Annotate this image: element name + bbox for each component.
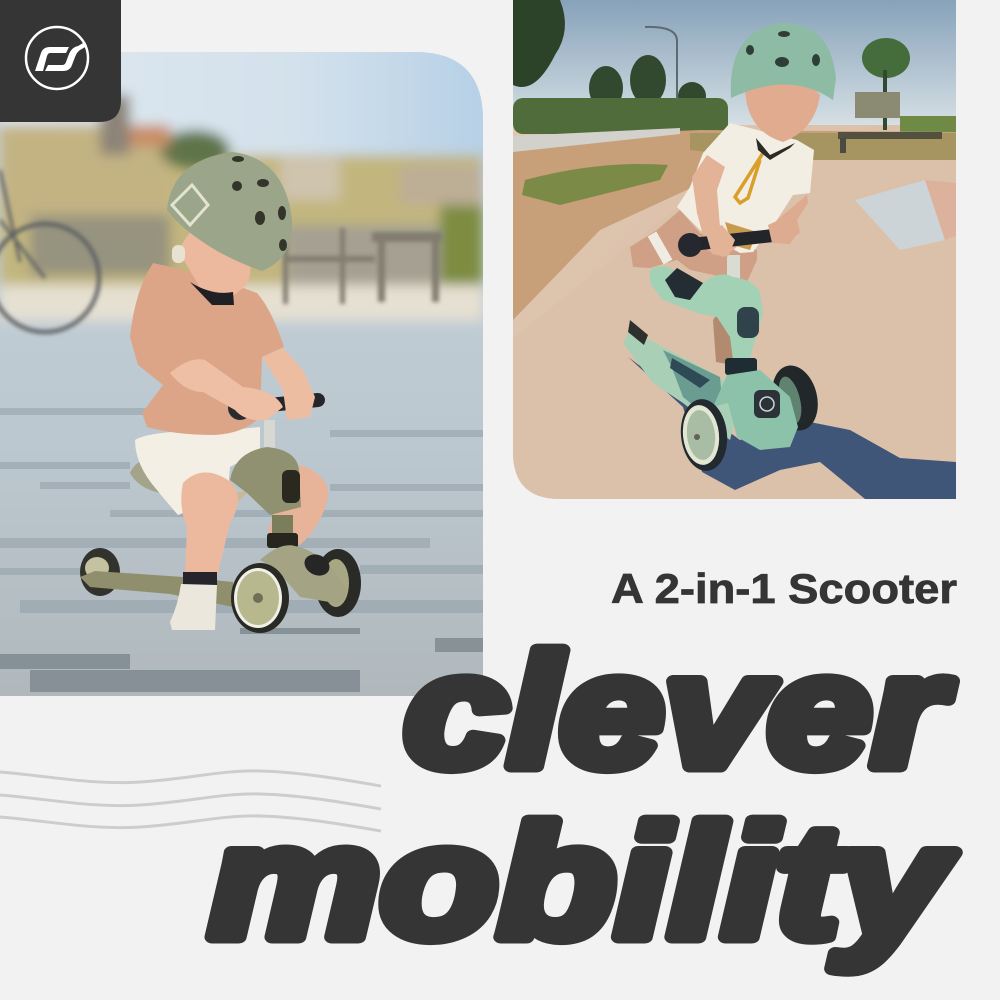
headline: clever: clever	[404, 621, 953, 800]
shadow	[628, 357, 956, 499]
distant trees and lamp post	[513, 0, 956, 134]
scooter rear and deck	[80, 460, 361, 617]
child body	[630, 123, 814, 365]
scooter	[623, 233, 824, 473]
photo: toddler on balance scooter	[0, 40, 500, 696]
concrete ramp	[513, 160, 956, 499]
logo badge	[0, 0, 121, 122]
child head and helmet	[731, 23, 836, 203]
scooter front	[228, 393, 330, 633]
icon: brand mark	[26, 27, 88, 89]
toddler arms	[170, 348, 315, 420]
bench	[838, 132, 942, 139]
decorative wavy lines	[0, 771, 381, 831]
photo: child on scooter at skate park	[513, 0, 956, 499]
headline: mobility: mobility	[209, 792, 955, 971]
paving bands	[0, 408, 483, 613]
bench	[283, 228, 442, 304]
child hands	[706, 221, 800, 257]
toddler helmet	[167, 152, 292, 271]
toddler body	[130, 232, 328, 630]
blurred park background	[0, 40, 500, 321]
handlebar	[240, 400, 318, 408]
bicycle wheel	[0, 170, 99, 332]
subtitle: A 2-in-1 Scooter	[611, 565, 957, 612]
dirt field	[513, 130, 956, 320]
